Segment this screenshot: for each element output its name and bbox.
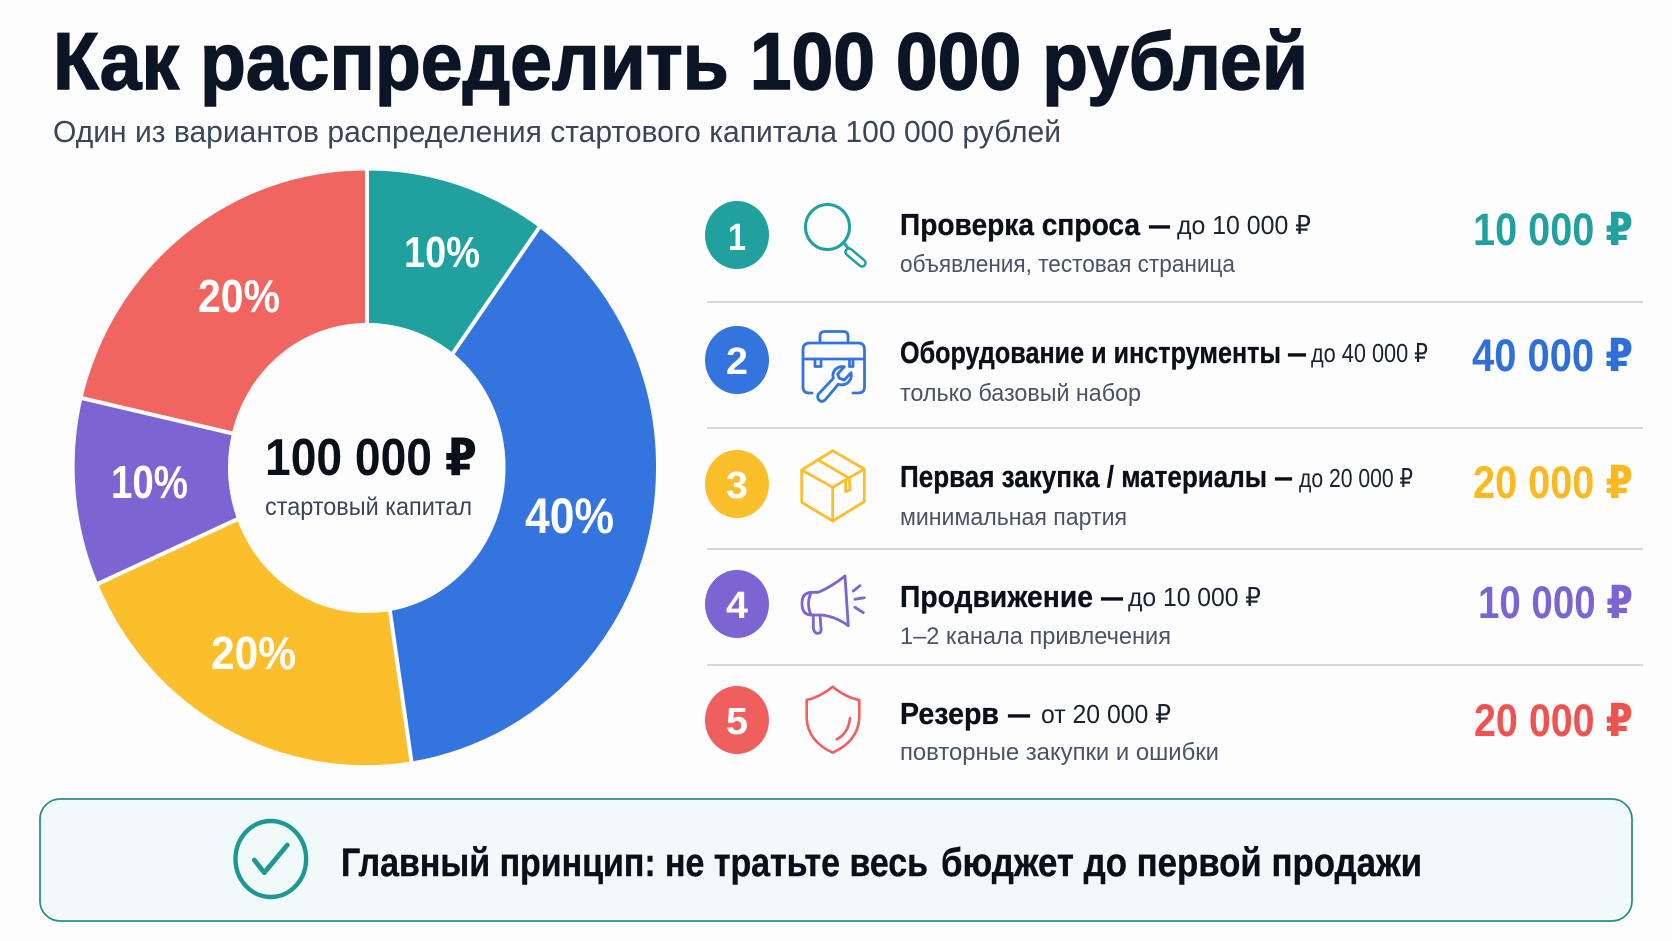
icon: shield [807,687,859,753]
row 2 heading: — [1288,335,1306,370]
row 5 description: повторные закупки и ошибки [900,739,1219,766]
row 3 heading: Первая закупка / материалы [900,459,1267,494]
icon: box [802,451,864,521]
donut labels: 10% [111,456,188,508]
callout text [341,841,1422,885]
row 5: reserve [705,686,1633,766]
row 3 heading: до 20 000 ₽ [1299,463,1413,493]
row 2 heading: Оборудование и инструменты [900,335,1281,370]
callout: main principle [40,799,1632,921]
row 5 heading: от 20 000 ₽ [1041,699,1171,729]
row 4 heading: — [1101,579,1123,614]
donut labels [111,228,614,679]
row 2: equipment [705,326,1633,407]
number badge 4 [705,570,769,638]
number badge 5 [705,686,769,754]
donut centre total: 100 000 ₽ [265,429,477,487]
donut labels: 20% [198,270,280,322]
callout text: Главный принцип: не тратьте весь [341,841,928,885]
number badge 2 [705,326,769,394]
row 1: demand check [705,201,1633,278]
subtitle: Один из вариантов распределения стартового капитала 100 000 рублей [53,114,1061,149]
row 4 heading: Продвижение [900,579,1093,614]
row 3 description: минимальная партия [900,504,1127,531]
title: Как распределить 100 000 рублей [53,17,1308,107]
number badge 3 [705,450,769,518]
row 4 heading: до 10 000 ₽ [1128,582,1261,612]
row 4 amount: 10 000 ₽ [1478,577,1633,628]
row 4 description: 1–2 канала привлечения [900,623,1171,650]
row 2 heading: до 40 000 ₽ [1311,338,1428,368]
donut centre total [265,429,477,521]
row 5 heading [900,696,1171,731]
row 3: first purchase [705,450,1633,531]
row 5 heading: Резерв [900,696,999,731]
donut chart [75,165,656,769]
number badge 5: 5 [726,701,748,743]
number badge 1 [705,201,769,269]
row 5 heading: — [1008,696,1030,731]
donut labels: 40% [525,488,614,544]
row 3 heading: — [1275,459,1292,494]
row 4 heading [900,579,1261,614]
row 1 heading: — [1149,207,1170,242]
row 2 description: только базовый набор [900,380,1141,407]
icon: check mark in circle [235,821,306,897]
number badge 4: 4 [726,585,748,627]
row 4: promotion [705,570,1633,650]
row 5 amount: 20 000 ₽ [1474,695,1633,746]
row 2 amount: 40 000 ₽ [1472,330,1633,381]
row 1 heading: до 10 000 ₽ [1177,210,1311,240]
row 1 amount: 10 000 ₽ [1473,204,1633,255]
number badge 1: 1 [728,217,746,259]
row 1 heading [900,207,1311,242]
icon: megaphone [802,576,864,633]
row 3 amount: 20 000 ₽ [1473,457,1633,508]
donut centre total: стартовый капитал [265,493,472,521]
icon: magnifier [806,204,862,263]
icon: toolbox with wrench [803,332,864,401]
number badge 3: 3 [726,465,748,507]
callout text: бюджет до первой продажи [941,841,1422,885]
row 1 description: объявления, тестовая страница [900,251,1236,278]
donut labels: 10% [404,228,480,277]
row 1 heading: Проверка спроса [900,207,1141,242]
donut labels: 20% [211,627,296,679]
number badge 2: 2 [726,341,748,383]
